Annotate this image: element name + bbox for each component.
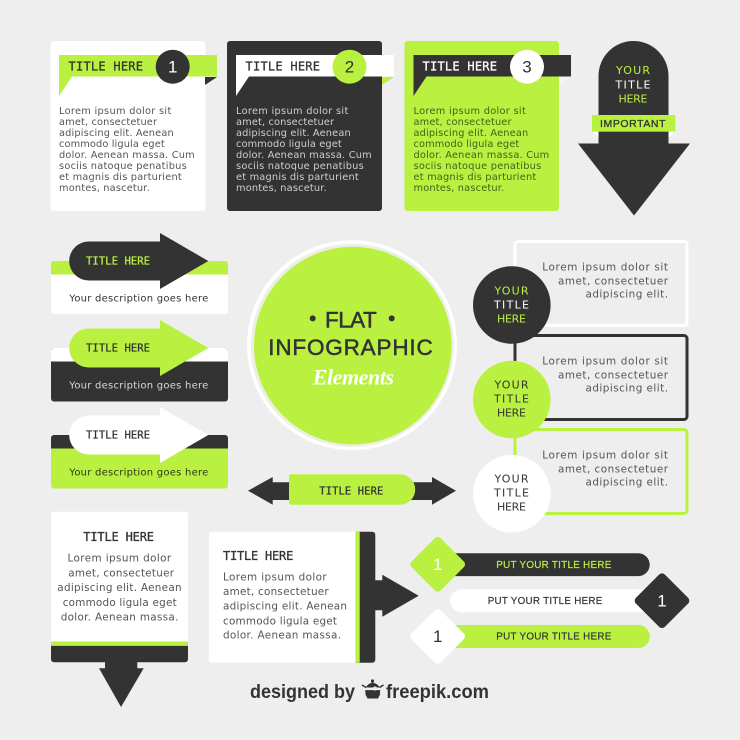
text: card 1 body bbox=[59, 106, 195, 194]
panel: numbered card 2 bbox=[227, 41, 394, 211]
heading: flat: FLAT bbox=[325, 307, 377, 332]
banner: arrow green on white and dark: Your description goes here bbox=[68, 380, 208, 392]
timeline circle 3: YOUR bbox=[494, 472, 529, 485]
text: card 1 body: amet, consectetuer bbox=[59, 117, 158, 128]
text: item 2 description bbox=[542, 356, 669, 395]
text: item 3 description: adipiscing elit. bbox=[586, 477, 668, 489]
banner: arrow white on dark and green bbox=[51, 407, 228, 488]
text: card body bbox=[57, 553, 182, 624]
timeline circle 1: YOUR bbox=[494, 284, 529, 297]
timeline circle 1 bbox=[473, 266, 551, 344]
icon: freepik mascot bbox=[362, 679, 384, 698]
footer credit: designed by bbox=[250, 681, 355, 703]
text: card 3 body: Lorem ipsum dolor sit bbox=[414, 106, 526, 117]
label band: important: IMPORTANT bbox=[600, 118, 666, 130]
timeline circle 3: TITLE bbox=[493, 486, 529, 499]
timeline circle 2: TITLE bbox=[493, 392, 529, 405]
double arrow title bbox=[248, 474, 456, 505]
text: your title here bbox=[614, 64, 651, 106]
icon: dark diamond number: 1 bbox=[657, 592, 667, 610]
ribbon: card 2 title: 2 bbox=[345, 58, 354, 76]
icon: green diamond number: 1 bbox=[433, 555, 442, 574]
text: card 2 body: Lorem ipsum dolor sit bbox=[236, 106, 348, 117]
text: card 2 body: dolor. Aenean massa. Cum bbox=[236, 150, 372, 161]
timeline item 3 bbox=[515, 430, 687, 514]
banner: arrow dark on green and white: Your description goes here bbox=[68, 294, 208, 304]
text: card 2 body: adipiscing elit. Aenean bbox=[236, 128, 351, 139]
timeline circle 2: YOUR bbox=[494, 378, 529, 391]
text: card 2 body: commodo ligula eget bbox=[236, 139, 342, 150]
text: card 3 body: sociis natoque penatibus bbox=[414, 161, 541, 172]
text: card 3 body: dolor. Aenean massa. Cum bbox=[414, 150, 549, 161]
text: card 2 body bbox=[236, 106, 372, 194]
panel: numbered card 1 bbox=[50, 41, 217, 211]
ribbon: card 1 title bbox=[59, 50, 217, 96]
text: item 3 description: amet, consectetuer bbox=[558, 463, 669, 475]
ribbon: card 3 title: TITLE HERE bbox=[422, 60, 497, 74]
text: card body: dolor. Aenean massa. bbox=[223, 630, 341, 642]
text: card 1 body: Lorem ipsum dolor sit bbox=[59, 106, 171, 117]
text: card body: commodo ligula eget bbox=[223, 615, 337, 627]
text: card 3 body: amet, consectetuer bbox=[414, 117, 512, 128]
text: card body: amet, consectetuer bbox=[223, 586, 329, 598]
ribbon: card 3 title: 3 bbox=[522, 58, 532, 76]
text: card body: amet, consectetuer bbox=[68, 567, 175, 579]
text: item 1 description: amet, consectetuer bbox=[558, 275, 669, 287]
ribbon: card 2 title bbox=[236, 50, 394, 96]
banner: arrow white on dark and green: TITLE HERE bbox=[86, 430, 150, 442]
banner: arrow white on dark and green: Your description goes here bbox=[68, 468, 208, 478]
list bar 3: PUT YOUR TITLE HERE bbox=[496, 632, 612, 643]
text: item 3 description: Lorem ipsum dolor sit bbox=[542, 450, 668, 462]
text: card 1 body: montes, nascetur. bbox=[59, 183, 150, 194]
banner: arrow green on white and dark: TITLE HERE bbox=[86, 343, 150, 355]
ribbon: card 1 title: TITLE HERE bbox=[68, 60, 143, 74]
central title circle bbox=[247, 240, 457, 450]
text: card body: commodo ligula eget bbox=[63, 597, 177, 609]
text: card 3 body: et magnis dis parturient bbox=[414, 172, 536, 183]
text: item 1 description: adipiscing elit. bbox=[586, 289, 668, 301]
timeline circle 1: TITLE bbox=[493, 298, 529, 311]
text: card body: Lorem ipsum dolor bbox=[223, 572, 327, 584]
icon: white diamond number: 1 bbox=[433, 627, 442, 646]
text: card 2 body: amet, consectetuer bbox=[236, 117, 335, 128]
banner: arrow green on white and dark bbox=[51, 320, 228, 402]
heading: title here: TITLE HERE bbox=[223, 549, 293, 563]
text: item 2 description: Lorem ipsum dolor sit bbox=[542, 356, 668, 368]
timeline item 2 bbox=[515, 336, 687, 420]
heading: flat bbox=[310, 307, 395, 332]
double arrow title: TITLE HERE bbox=[319, 486, 383, 498]
list bar 1 bbox=[409, 535, 650, 593]
text: card body bbox=[223, 572, 347, 642]
ribbon: card 2 title: TITLE HERE bbox=[246, 60, 320, 74]
text: card 3 body bbox=[414, 106, 549, 194]
footer credit bbox=[250, 679, 489, 703]
ribbon: card 3 title bbox=[414, 50, 571, 96]
text: card 3 body: montes, nascetur. bbox=[414, 183, 504, 194]
text: card 2 body: sociis natoque penatibus bbox=[236, 161, 364, 172]
text: card 1 body: sociis natoque penatibus bbox=[59, 161, 187, 172]
arrow: important down arrow bbox=[578, 41, 690, 216]
ribbon: card 1 title: 1 bbox=[168, 58, 177, 76]
timeline circle 3 bbox=[473, 455, 551, 533]
banner: arrow dark on green and white: TITLE HERE bbox=[86, 256, 150, 268]
text: card body: Lorem ipsum dolor bbox=[68, 553, 172, 565]
banner: arrow dark on green and white bbox=[51, 233, 228, 314]
panel: card with down arrow bbox=[51, 512, 188, 707]
text: card 1 body: et magnis dis parturient bbox=[59, 172, 182, 183]
text: card body: dolor. Aenean massa. bbox=[61, 612, 178, 624]
list bar 2 bbox=[450, 572, 691, 630]
text: card 2 body: et magnis dis parturient bbox=[236, 172, 359, 183]
text: item 2 description: adipiscing elit. bbox=[586, 383, 668, 395]
list bar 2: PUT YOUR TITLE HERE bbox=[488, 596, 603, 607]
text: card 1 body: dolor. Aenean massa. Cum bbox=[59, 150, 195, 161]
label band: important bbox=[592, 115, 675, 132]
text: card 3 body: adipiscing elit. Aenean bbox=[414, 128, 528, 139]
text: your title here: YOUR bbox=[615, 64, 650, 77]
subtitle: elements: Elements bbox=[312, 364, 394, 389]
text: item 2 description: amet, consectetuer bbox=[558, 369, 669, 381]
icon: white diamond number bbox=[409, 607, 467, 665]
text: item 1 description: Lorem ipsum dolor sit bbox=[542, 262, 668, 274]
text: card body: adipiscing elit. Aenean bbox=[223, 601, 347, 613]
heading: title here: TITLE HERE bbox=[83, 530, 154, 544]
footer credit: freepik.com bbox=[386, 681, 489, 703]
icon: green diamond number bbox=[409, 535, 467, 593]
panel: numbered card 3 bbox=[404, 41, 571, 211]
timeline circle 2 bbox=[473, 361, 551, 438]
icon: dark diamond number bbox=[633, 572, 691, 630]
text: your title here: HERE bbox=[618, 92, 648, 106]
text: your title here: TITLE bbox=[614, 78, 651, 91]
panel: card with right arrow bbox=[209, 532, 419, 663]
list bar 1: PUT YOUR TITLE HERE bbox=[496, 560, 612, 571]
timeline item 1 bbox=[515, 242, 687, 326]
text: card body: adipiscing elit. Aenean bbox=[57, 582, 182, 594]
timeline circle 3: HERE bbox=[497, 500, 526, 514]
timeline circle 1: HERE bbox=[497, 313, 526, 326]
text: item 1 description bbox=[542, 262, 669, 301]
heading: infographic: INFOGRAPHIC bbox=[268, 335, 433, 360]
timeline circle 2: HERE bbox=[497, 407, 526, 420]
text: item 3 description bbox=[542, 450, 669, 489]
text: card 3 body: commodo ligula eget bbox=[414, 139, 519, 150]
text: card 1 body: adipiscing elit. Aenean bbox=[59, 128, 174, 139]
list bar 3 bbox=[409, 607, 650, 665]
text: card 1 body: commodo ligula eget bbox=[59, 139, 165, 150]
text: card 2 body: montes, nascetur. bbox=[236, 183, 327, 194]
